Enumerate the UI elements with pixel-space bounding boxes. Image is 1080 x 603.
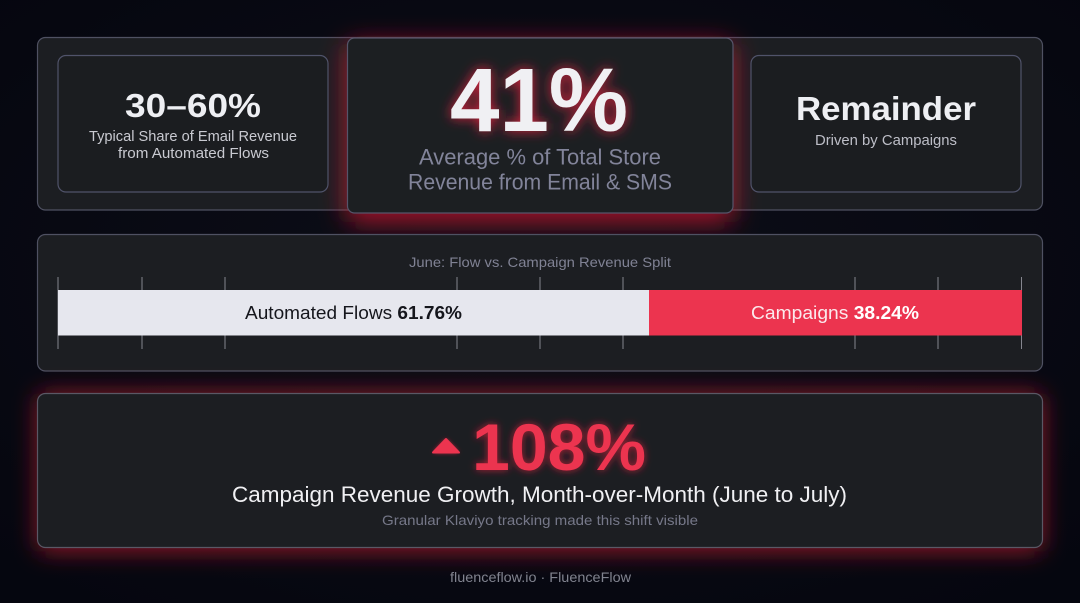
caption: revenue source: Revenue from Email & SMS — [408, 170, 672, 194]
caption: tracking note: Granular Klaviyo tracking made this shift visible — [382, 512, 698, 528]
chart title: June: Flow vs. Campaign Revenue Split — [409, 254, 671, 270]
caption: driven by campaigns: Driven by Campaigns — [815, 132, 957, 149]
segment: campaigns — [649, 290, 1022, 336]
stat: remainder: Remainder — [796, 90, 976, 127]
stat: 41%: 41% — [450, 51, 628, 151]
stacked bar — [58, 290, 1022, 336]
icon: up arrow — [433, 439, 459, 452]
center card glow — [347, 44, 733, 222]
caption: average share: Average % of Total Store — [419, 144, 661, 170]
stat glow: 108% — [472, 410, 646, 484]
card: 41% — [348, 38, 733, 213]
card: remainder — [751, 56, 1021, 192]
label: campaigns: Campaigns 38.24% — [751, 303, 919, 323]
tick marks — [58, 277, 1022, 349]
footer: fluenceflow.io · FluenceFlow — [450, 569, 632, 585]
panel: top stats — [38, 38, 1042, 222]
panel: revenue split — [38, 234, 1042, 371]
segment: automated flows — [58, 290, 649, 336]
stat: 30-60%: 30–60% — [125, 87, 261, 124]
label: automated flows: Automated Flows 61.76% — [245, 303, 462, 323]
caption: typical share: Typical Share of Email Revenue — [89, 128, 297, 145]
card: 30-60% — [58, 56, 328, 192]
caption: growth: Campaign Revenue Growth, Month-over-Month (June to July) — [232, 482, 847, 507]
caption: automated flows: from Automated Flows — [118, 145, 269, 162]
stat: 108%: 108% — [472, 410, 646, 484]
panel: growth glow — [38, 394, 1042, 552]
panel: campaign growth — [38, 394, 1042, 548]
stat glow: 41% — [450, 51, 628, 151]
